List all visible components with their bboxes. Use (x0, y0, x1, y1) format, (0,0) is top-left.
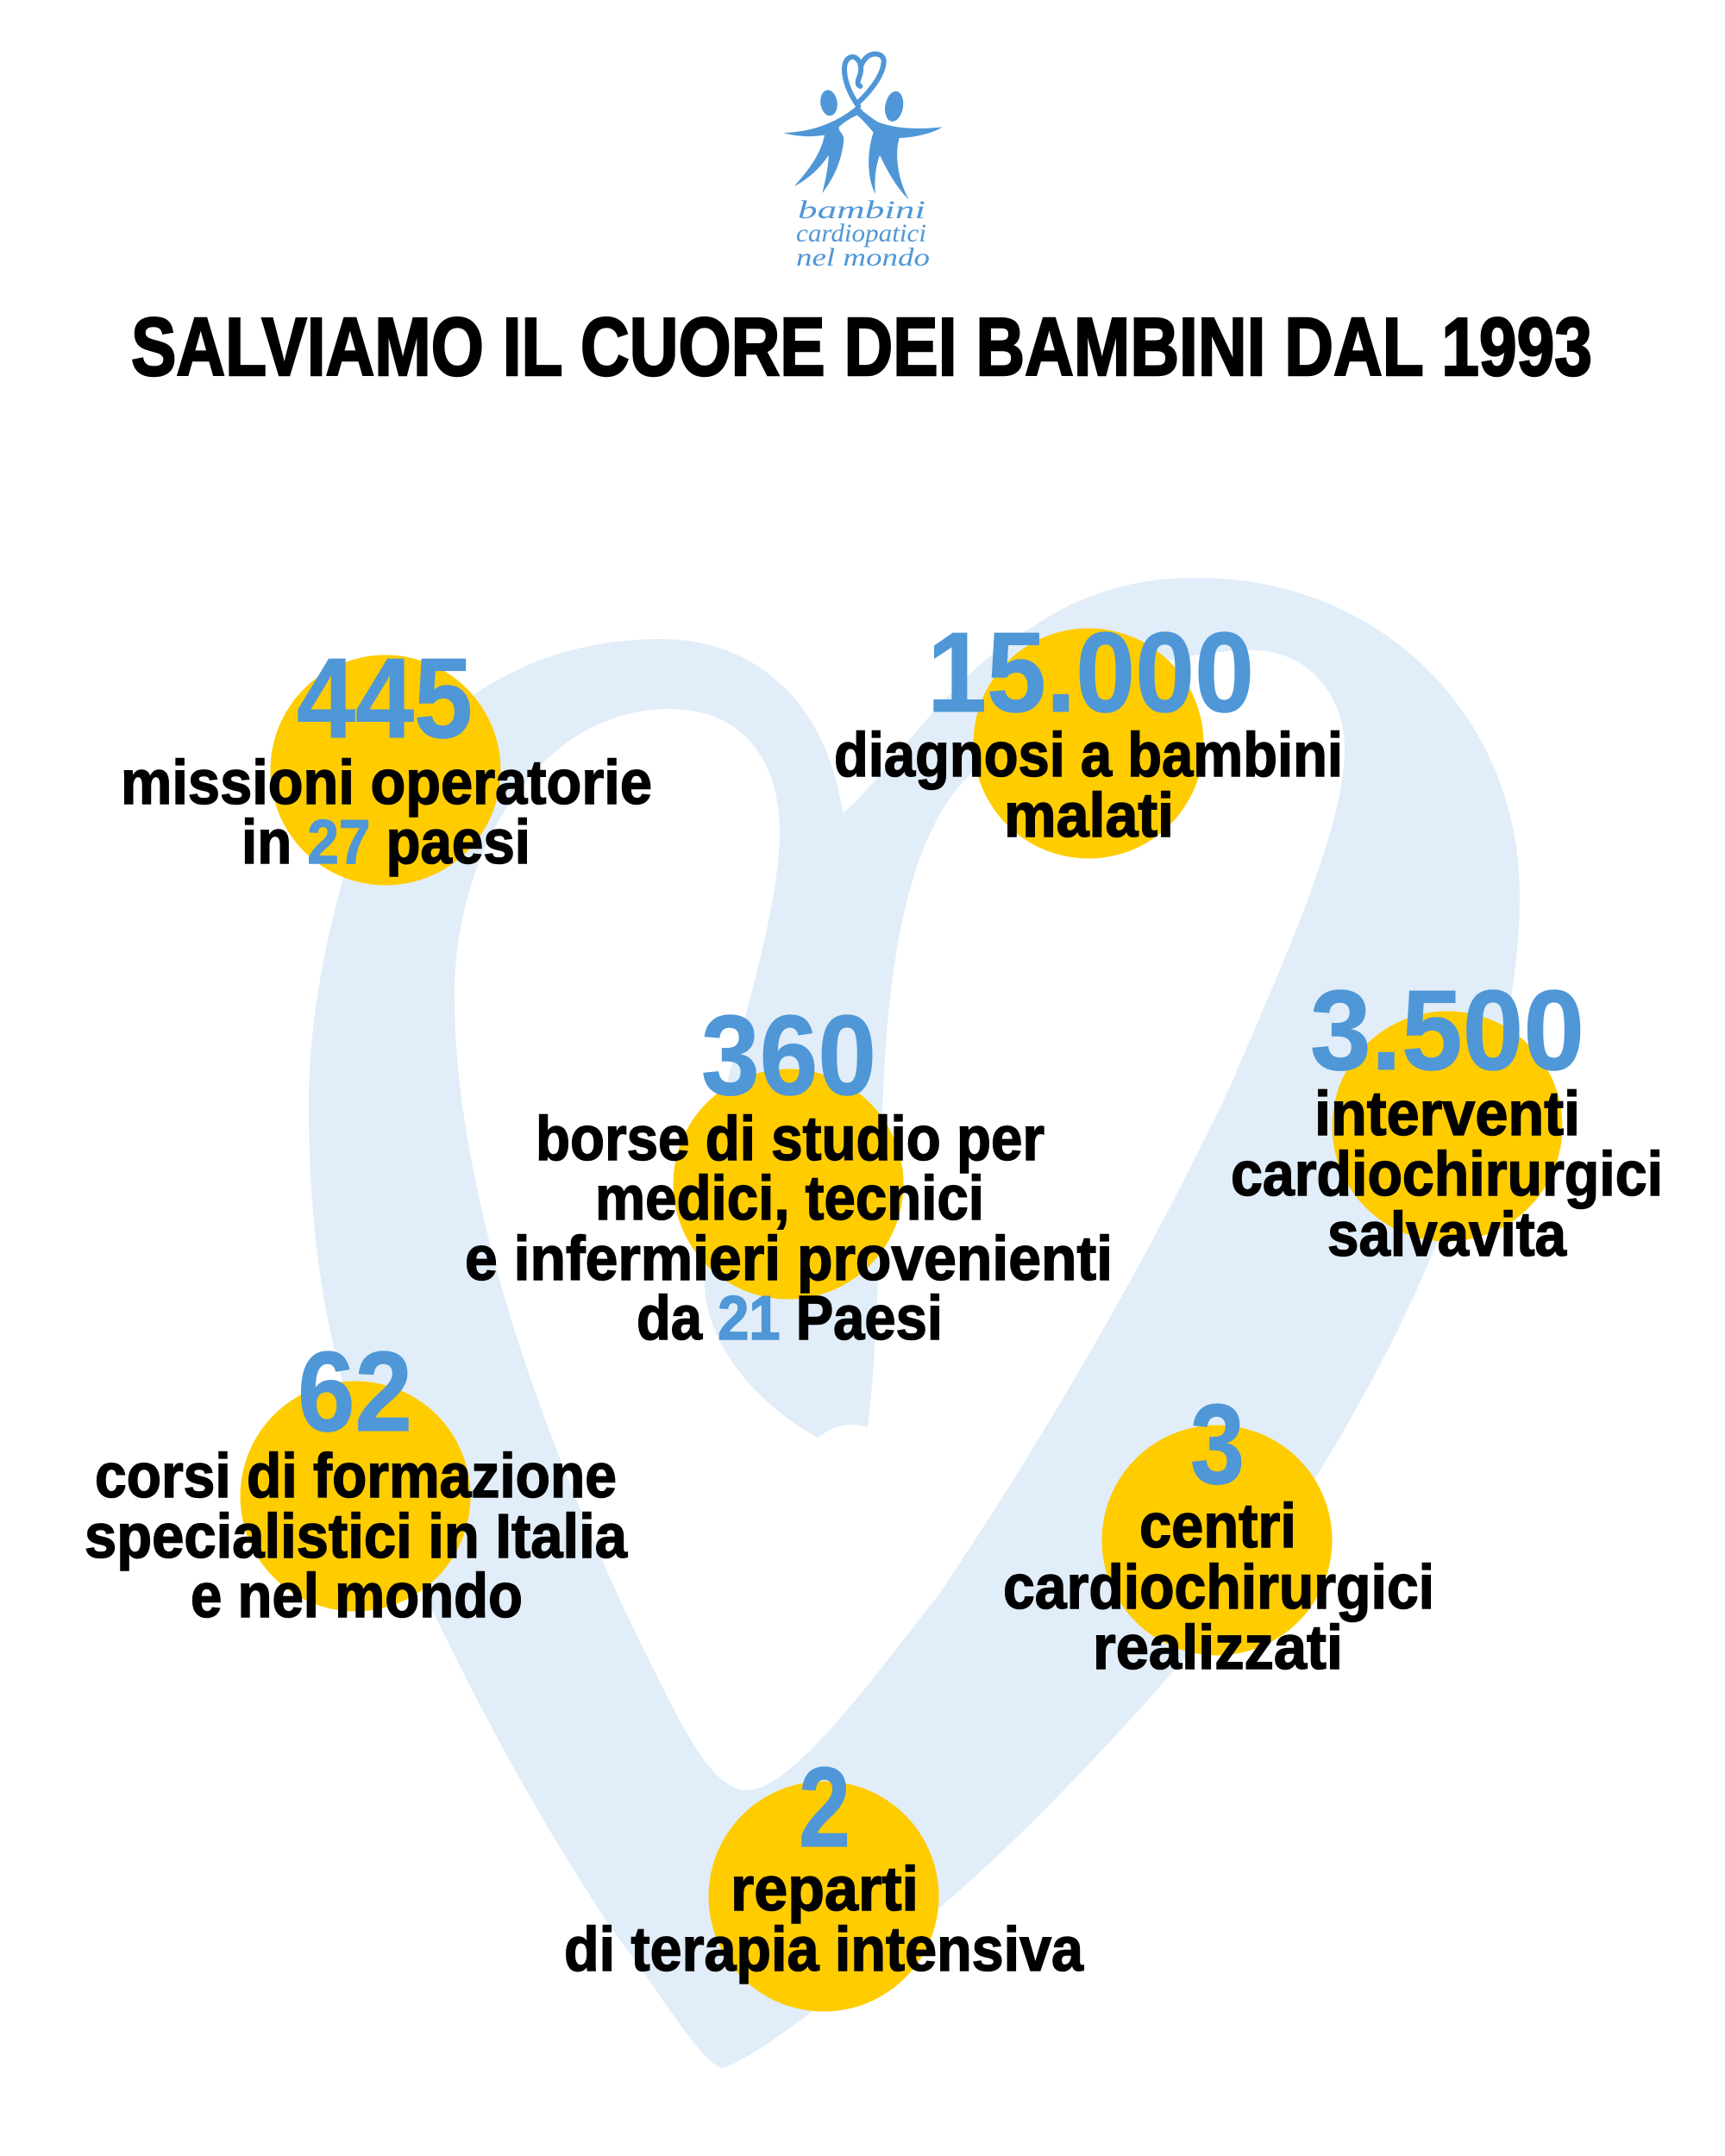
description (465, 1105, 1113, 1353)
description: in 27 paesi (242, 808, 530, 877)
yellow circle (673, 1069, 904, 1299)
stat: 62 corsi (85, 1328, 628, 1631)
stat: 15.000 diagnosi (834, 609, 1343, 859)
description: specialistici in Italia (85, 1502, 628, 1571)
stat: 2 reparti (564, 1744, 1084, 2011)
description: medici, tecnici (595, 1164, 984, 1233)
logo: bambini cardiopatici nel mondo (783, 54, 943, 272)
number: 62 (298, 1328, 412, 1455)
description: cardiochirurgici (1231, 1140, 1663, 1209)
description (85, 1442, 628, 1631)
description: e nel mondo (191, 1562, 523, 1631)
description: diagnosi a bambini (834, 721, 1343, 790)
stat: 3.500 interventi (1231, 967, 1663, 1269)
description: missioni operatorie (121, 749, 652, 818)
description: malati (1004, 781, 1174, 850)
yellow circle (973, 628, 1204, 859)
logo wordmark (796, 196, 930, 272)
number: 15.000 (927, 609, 1254, 736)
description: centri (1139, 1492, 1296, 1561)
yellow circle (271, 655, 500, 885)
icon: two children joined by a heart ribbon (783, 54, 943, 200)
description: da 21 Paesi (637, 1284, 943, 1353)
yellow circle (240, 1382, 471, 1611)
description: cardiochirurgici (1003, 1553, 1434, 1622)
description: corsi di formazione (95, 1442, 617, 1511)
logo wordmark: cardiopatici (796, 219, 926, 248)
yellow circle (709, 1782, 938, 2011)
number: 3 (1190, 1381, 1245, 1507)
description: borse di studio per (536, 1105, 1044, 1174)
number: 445 (297, 635, 473, 761)
description: interventi (1314, 1080, 1580, 1149)
stat: 445 missioni operatorie (121, 635, 652, 885)
description (834, 721, 1343, 850)
logo wordmark: nel mondo (796, 243, 930, 272)
description: salvavita (1327, 1200, 1567, 1269)
description (564, 1855, 1084, 1984)
yellow circle (1102, 1425, 1332, 1656)
yellow circle (1332, 1011, 1563, 1242)
number: 2 (799, 1744, 850, 1871)
description (1231, 1080, 1663, 1269)
description: reparti (731, 1855, 919, 1924)
stat: 3 centri (1003, 1381, 1434, 1683)
number: 360 (701, 992, 876, 1119)
background heart ribbon (309, 578, 1520, 2068)
logo wordmark: bambini (798, 196, 925, 224)
description (121, 749, 652, 877)
description: realizzati (1093, 1614, 1343, 1683)
description: di terapia intensiva (564, 1915, 1084, 1984)
description: e infermieri provenienti (465, 1225, 1113, 1294)
description (1003, 1492, 1434, 1683)
stat: 360 borse di studio (465, 992, 1113, 1353)
number: 3.500 (1310, 967, 1584, 1094)
